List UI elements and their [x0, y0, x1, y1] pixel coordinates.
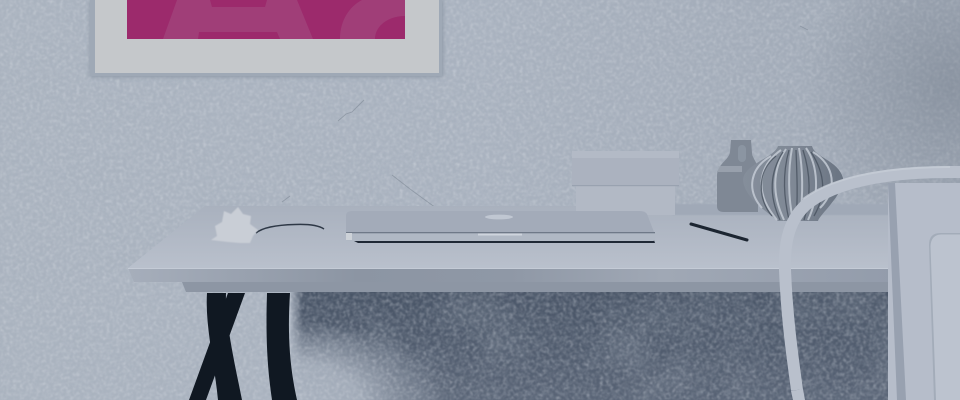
- table legs: [189, 293, 297, 400]
- table: [128, 206, 892, 400]
- chair back panel: [888, 183, 960, 400]
- chair tubular frame: [785, 172, 950, 390]
- poster mat: [95, 0, 439, 73]
- wall shadow under table: [291, 292, 900, 400]
- table top surface: [128, 206, 892, 268]
- table front edge: [128, 268, 892, 282]
- poster: [90, 0, 443, 77]
- poster artwork: [127, 0, 405, 39]
- box on table: [572, 151, 679, 215]
- poster shadow: [90, 0, 443, 77]
- flower: [211, 207, 324, 243]
- chair: [785, 166, 960, 400]
- small grey vase: [717, 140, 758, 212]
- table underside frame: [182, 282, 892, 292]
- back shadow on table: [672, 204, 890, 215]
- poster frame: [90, 0, 442, 76]
- laptop: [346, 211, 655, 243]
- pencil: [691, 224, 747, 240]
- ribbed vase: [743, 146, 843, 221]
- chair inset panel: [929, 233, 960, 400]
